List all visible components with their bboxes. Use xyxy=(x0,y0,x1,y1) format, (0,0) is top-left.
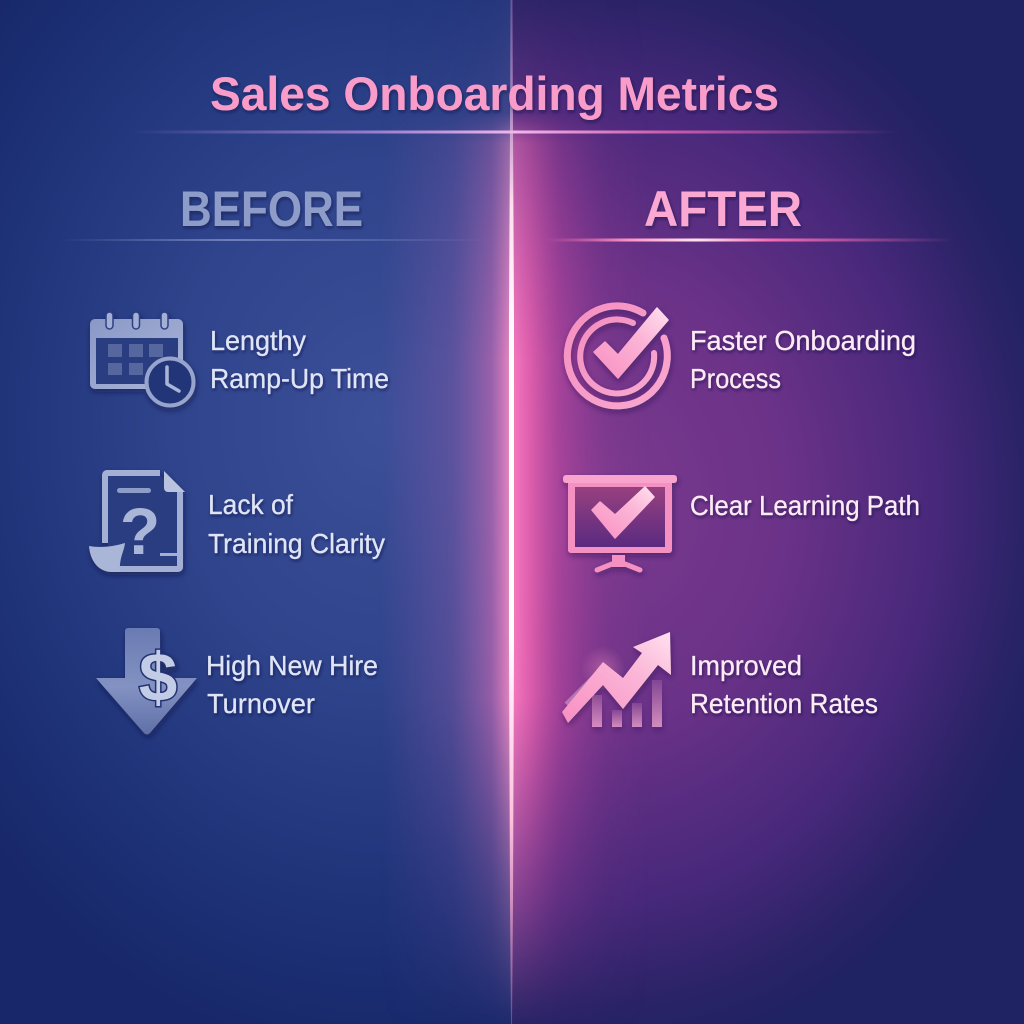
panel: after items xyxy=(562,306,920,727)
text: lengthy ramp-up time xyxy=(210,325,389,394)
text: lack of training clarity: Lack of xyxy=(208,489,293,520)
title: Sales Onboarding Metrics xyxy=(210,67,779,120)
after heading: AFTER xyxy=(644,181,802,237)
after rule xyxy=(545,238,955,242)
icon: rising arrow with bars xyxy=(562,632,671,727)
central glowing divider xyxy=(396,0,612,1024)
background: before side xyxy=(0,0,512,1024)
icon: down arrow with dollar: $ xyxy=(139,639,177,716)
icon: document with question mark: ? xyxy=(120,494,160,568)
text: clear learning path: Clear Learning Path xyxy=(690,490,920,521)
panel: before items xyxy=(89,312,389,734)
text: lack of training clarity: Training Clarity xyxy=(208,528,385,559)
background: after side xyxy=(512,0,1024,1024)
icon: document with question mark xyxy=(89,470,185,572)
text: lack of training clarity xyxy=(208,489,385,559)
text: high new hire turnover: High New Hire xyxy=(206,650,378,681)
icon: down arrow with dollar xyxy=(96,628,197,734)
text: faster onboarding process: Process xyxy=(690,363,781,394)
title rule xyxy=(130,130,900,134)
text: improved retention rates: Improved xyxy=(690,650,802,681)
text: high new hire turnover: Turnover xyxy=(207,688,315,719)
icon: target circle with check xyxy=(567,306,668,406)
text: faster onboarding process: Faster Onboarding xyxy=(690,325,916,356)
text: improved retention rates: Retention Rates xyxy=(690,688,878,719)
text: lengthy ramp-up time: Ramp-Up Time xyxy=(210,363,389,394)
icon: calendar with clock xyxy=(90,312,194,406)
before heading: BEFORE xyxy=(180,181,363,237)
text: faster onboarding process xyxy=(690,325,916,394)
text: improved retention rates xyxy=(690,650,878,719)
icon: presentation screen with check xyxy=(563,475,677,570)
text: lengthy ramp-up time: Lengthy xyxy=(210,325,306,356)
text: high new hire turnover xyxy=(206,650,378,719)
before rule xyxy=(60,239,490,241)
